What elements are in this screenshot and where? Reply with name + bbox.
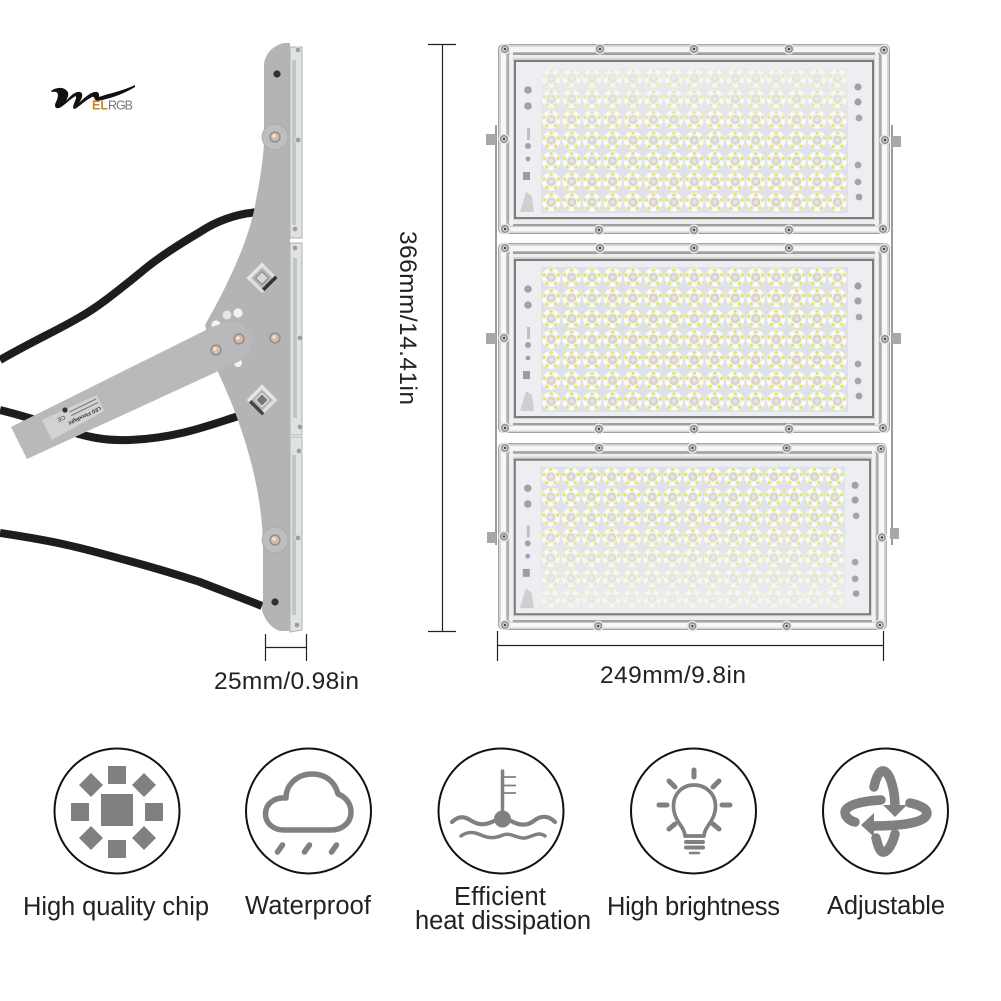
side view: mounting arm with label: LED Floodlight bbox=[67, 405, 102, 426]
side depth dimension: 25mm/0.98in bbox=[214, 668, 359, 695]
side view: mounting arm with label: CE bbox=[56, 413, 66, 422]
width dimension: 249mm/9.8in bbox=[600, 662, 746, 689]
side view: mounting arm with label bbox=[11, 322, 252, 459]
front view: top LED panel bbox=[498, 44, 890, 236]
side view: light fixture housing bbox=[205, 43, 303, 632]
feature: waterproof bbox=[245, 748, 372, 920]
side depth dimension bbox=[214, 634, 359, 695]
feature: adjustable bbox=[823, 748, 948, 920]
logo: ELRGB: RGB bbox=[108, 98, 133, 112]
feature: efficient heat dissipation bbox=[415, 748, 591, 935]
feature: efficient heat dissipation: heat dissipation bbox=[415, 907, 591, 935]
feature: adjustable: Adjustable bbox=[827, 892, 945, 920]
feature: high brightness bbox=[607, 748, 780, 921]
width dimension bbox=[497, 631, 884, 689]
logo: ELRGB: EL bbox=[92, 98, 108, 112]
feature: high quality chip bbox=[23, 748, 209, 921]
feature: waterproof: Waterproof bbox=[245, 892, 372, 920]
feature: high brightness: High brightness bbox=[607, 893, 780, 921]
side view: power cables bbox=[0, 212, 262, 606]
height dimension bbox=[394, 44, 456, 632]
front view: connectors bbox=[486, 134, 901, 543]
front view: bracket behind panels bbox=[495, 125, 893, 545]
feature: high quality chip: High quality chip bbox=[23, 893, 209, 921]
height dimension: 366mm/14.41in bbox=[394, 231, 421, 405]
feature: efficient heat dissipation: Efficient bbox=[454, 883, 546, 911]
logo: ELRGB bbox=[51, 85, 135, 112]
front view: middle LED panel bbox=[498, 242, 890, 434]
front view: bottom LED panel bbox=[498, 443, 887, 631]
